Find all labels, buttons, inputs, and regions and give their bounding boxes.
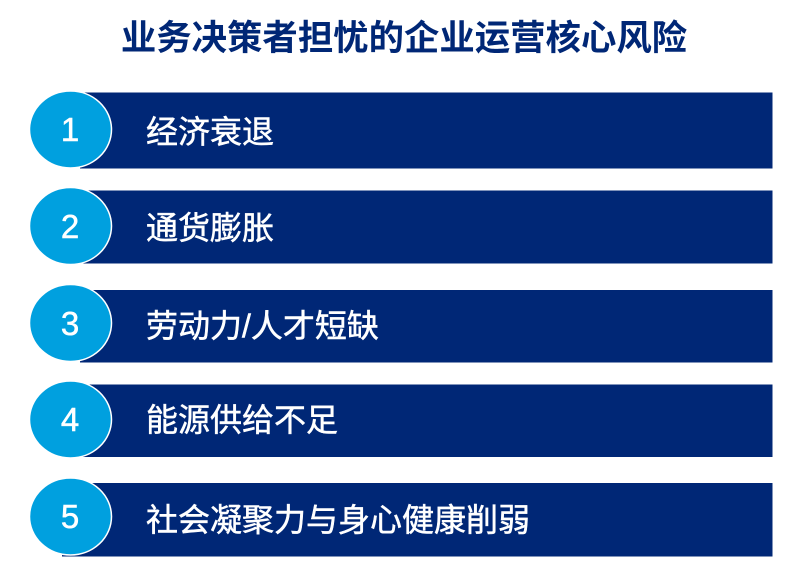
- number 5: 5: [61, 498, 79, 535]
- circle badge 5: [30, 478, 112, 555]
- bar 1: [80, 92, 772, 168]
- label 1: 经济衰退: [146, 114, 274, 150]
- row 1: 经济衰退: [30, 91, 772, 168]
- row 2: 通货膨胀: [30, 188, 772, 264]
- circle badge 2: [30, 188, 112, 264]
- row 4: 能源供给不足: [30, 381, 772, 458]
- row 3: 劳动力/人才短缺: [30, 284, 772, 362]
- number 3: 3: [61, 305, 79, 342]
- label 4: 能源供给不足: [146, 402, 338, 438]
- circle badge 4: [30, 381, 112, 458]
- label 3: 劳动力/人才短缺: [146, 308, 379, 344]
- bar 4: [80, 384, 772, 457]
- circle badge 1: [30, 91, 112, 168]
- bar 2: [80, 190, 772, 264]
- label 5: 社会凝聚力与身心健康削弱: [146, 502, 530, 538]
- row 5: 社会凝聚力与身心健康削弱: [30, 478, 772, 556]
- number 4: 4: [61, 401, 79, 438]
- number 2: 2: [61, 208, 79, 245]
- bar 5: [62, 483, 772, 556]
- label 2: 通货膨胀: [146, 210, 274, 246]
- circle badge 3: [30, 284, 112, 362]
- number 1: 1: [61, 111, 79, 148]
- bar 3: [80, 290, 772, 362]
- title: 业务决策者担忧的企业运营核心风险: [121, 18, 687, 58]
